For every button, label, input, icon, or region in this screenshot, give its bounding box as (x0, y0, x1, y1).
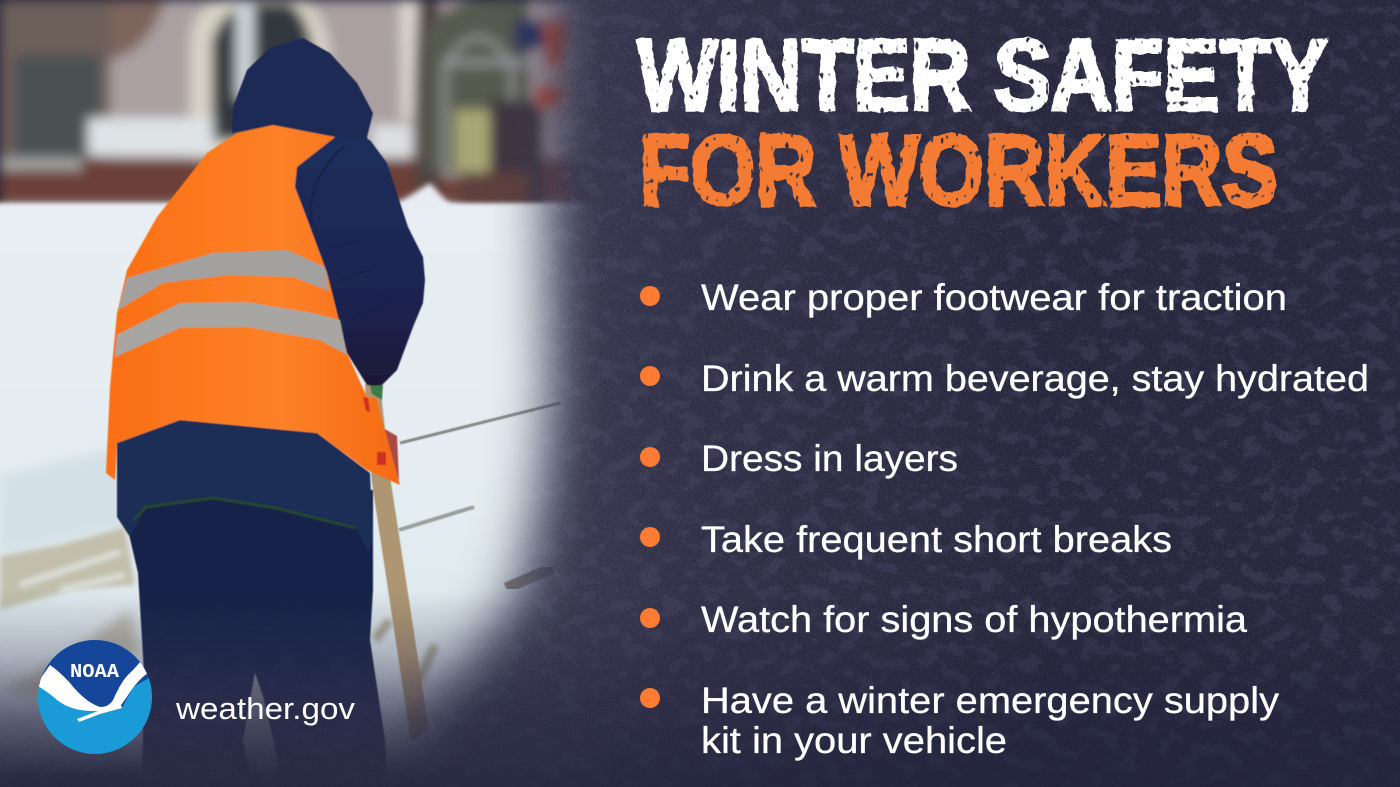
photo: hood (232, 38, 373, 145)
logo: white seagull (36, 662, 149, 722)
photo: upper reflective stripe (118, 250, 329, 310)
tip 6: emergency supply kit: kit in your vehicle (701, 720, 1007, 761)
tip 2: warm beverage: Drink a warm beverage, stay hydrated (701, 358, 1369, 399)
photo: worker figure (106, 38, 429, 787)
tip 4: short breaks: Take frequent short breaks (701, 519, 1172, 560)
heading: winter safety for workers (637, 20, 1328, 227)
photo: blurred building backdrop (0, 0, 600, 220)
text: website: weather.gov (175, 691, 356, 726)
heading line two: FOR WORKERS (639, 115, 1278, 227)
list: safety tips (640, 277, 1369, 761)
photo: snow ground (0, 183, 610, 787)
photo: gap between legs (243, 673, 277, 775)
logo: NOAA wordmark: NOAA (70, 661, 120, 683)
photo: glove (383, 428, 399, 480)
tip 6: emergency supply kit (640, 680, 1280, 761)
photo: worker trousers (128, 490, 388, 787)
photo: jacket hem (117, 420, 373, 552)
tip 6: emergency supply kit: Have a winter emergency supply (701, 680, 1280, 721)
tip 5: hypothermia: Watch for signs of hypothermia (701, 599, 1247, 640)
photo: shovel handle (365, 384, 429, 742)
photo: red vest tabs (363, 397, 386, 465)
logo: dark blue sky segment (39, 640, 149, 708)
logo: NOAA emblem (38, 640, 152, 754)
photo: green cuff (370, 385, 383, 400)
tip 3: layers: Dress in layers (701, 438, 958, 479)
tip 1: footwear: Wear proper footwear for traction (701, 277, 1287, 318)
photo: high visibility vest (106, 125, 400, 485)
panel: winter photo of worker (0, 0, 610, 787)
photo: green jacket lining (134, 498, 356, 528)
photo: jacket sleeve (295, 137, 425, 387)
photo: tan snow curb (0, 527, 135, 610)
photo: lower reflective stripe (115, 302, 347, 357)
